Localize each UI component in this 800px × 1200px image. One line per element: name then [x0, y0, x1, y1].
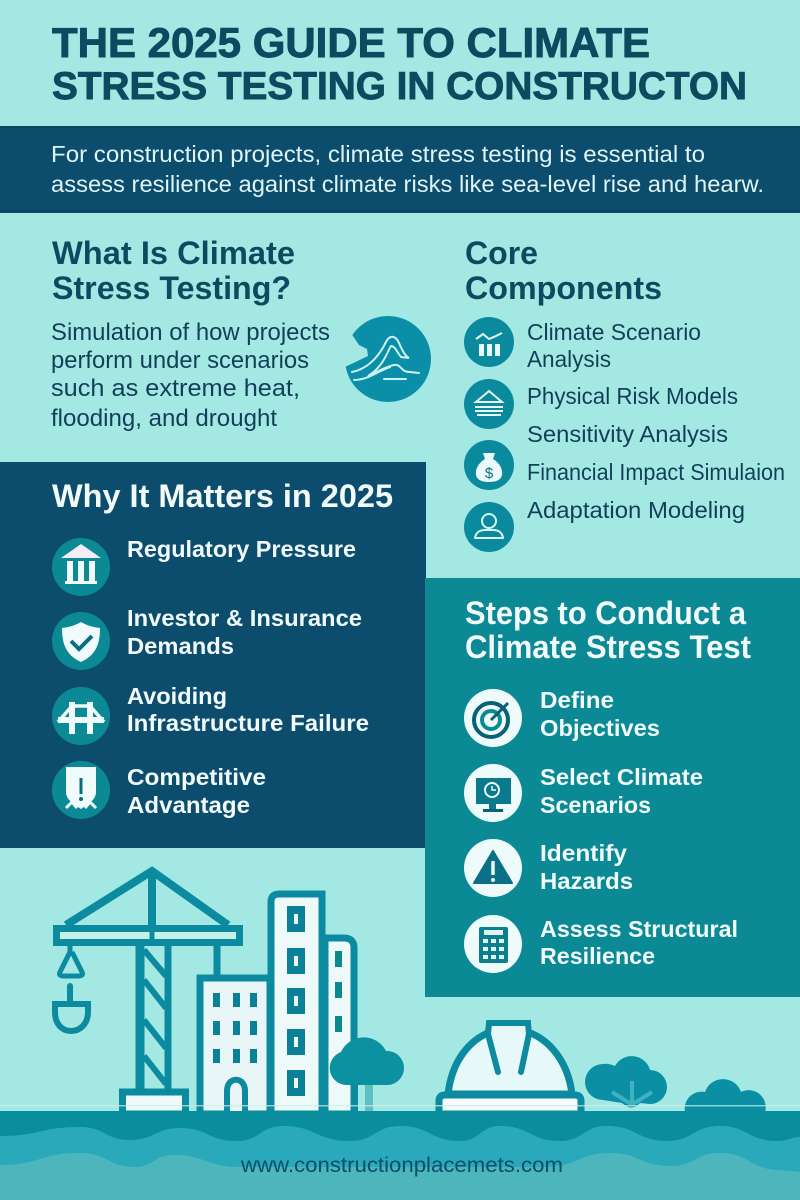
icon: calculator: [464, 915, 522, 973]
illustration: tree: [330, 1037, 404, 1114]
title: STRESS TESTING IN CONSTRUCTON: [52, 65, 747, 108]
text: assess structural resilience: Resilience: [540, 943, 655, 969]
text: competitive advantage: Advantage: [127, 792, 250, 818]
text: climate scenario analysis: Analysis: [527, 346, 611, 372]
text: define objectives: Objectives: [540, 715, 660, 741]
text block: definition: such as extreme heat,: [51, 375, 300, 402]
text block: definition: perform under scenarios: [51, 347, 309, 374]
heading: core components: [465, 235, 662, 306]
icon: target: [464, 689, 522, 747]
text: identify hazards: Hazards: [540, 868, 633, 894]
text: avoiding infrastructure failure: Infrastructure Failure: [127, 710, 369, 736]
icon: warning triangle: [464, 839, 522, 897]
icon: alert shield: [52, 761, 110, 819]
heading: what is climate stress testing: Stress Testing?: [52, 270, 291, 306]
heading: core components: Components: [465, 270, 662, 306]
panel: what is climate stress testing: [51, 235, 431, 432]
text: competitive advantage: Competitive: [127, 764, 266, 790]
text: investor and insurance demands: Demands: [127, 633, 234, 659]
text: identify hazards: [540, 840, 633, 894]
text block: definition: flooding, and drought: [51, 405, 277, 432]
illustration: cloud shrub: [585, 1056, 667, 1108]
panel: intro banner: [0, 126, 800, 213]
text: select climate scenarios: Select Climate: [540, 764, 703, 790]
illustration: hard hat: [439, 1023, 581, 1114]
icon: wave: [335, 316, 431, 402]
icon: bridge: [52, 687, 110, 745]
text: assess structural resilience: [540, 916, 738, 969]
text: investor and insurance demands: [127, 605, 362, 659]
text: sensitivity analysis: Sensitivity Analysis: [527, 421, 728, 447]
text: identify hazards: Identify: [540, 840, 627, 866]
panel: steps to conduct a climate stress test: [425, 578, 800, 997]
footer url: www.constructionplacemets.com: [240, 1154, 563, 1177]
heading: what is climate stress testing: [52, 235, 295, 306]
icon: institution: [52, 538, 110, 596]
icon: chart: [464, 317, 514, 367]
text: investor and insurance demands: Investor & Insurance: [127, 605, 362, 631]
icon: shield check: [52, 612, 110, 670]
illustration: crane: [55, 871, 240, 1114]
panel: why it matters: [0, 462, 426, 848]
title: [52, 19, 747, 108]
heading: why it matters: Why It Matters in 2025: [52, 478, 393, 514]
heading: what is climate stress testing: What Is Climate: [52, 235, 295, 271]
text: avoiding infrastructure failure: Avoiding: [127, 683, 227, 709]
heading: core components: Core: [465, 235, 538, 271]
text: financial impact simulaion: Financial Impact Simulaion: [527, 459, 785, 485]
text: climate scenario analysis: [527, 319, 701, 372]
panel: intro banner: For construction projects, climate stress testing is essential to: [51, 141, 705, 167]
building: right block: [325, 938, 354, 1114]
illustration: bush: [685, 1079, 766, 1112]
icon: money bag: $: [485, 465, 494, 482]
ground and waves: [0, 1105, 800, 1200]
icon: monitor: [464, 764, 522, 822]
text: avoiding infrastructure failure: [127, 683, 369, 736]
text: climate scenario analysis: Climate Scenario: [527, 319, 701, 345]
text: select climate scenarios: Scenarios: [540, 792, 651, 818]
text: regulatory pressure: Regulatory Pressure: [127, 536, 356, 562]
title: THE 2025 GUIDE TO CLIMATE: [52, 19, 650, 66]
text block: definition: Simulation of how projects: [51, 319, 330, 346]
text: select climate scenarios: [540, 764, 703, 818]
text block: definition: [51, 319, 330, 432]
panel: core components: [464, 235, 785, 552]
panel: intro banner: assess resilience against climate risks like sea-level rise and hearw.: [51, 171, 764, 197]
icon: money bag: [464, 440, 514, 490]
text: define objectives: [540, 687, 660, 741]
heading: steps: Steps to Conduct a: [465, 595, 746, 631]
text: competitive advantage: [127, 764, 266, 818]
text: physical risk models: Physical Risk Models: [527, 383, 738, 409]
icon: person: [464, 502, 514, 552]
building: low block: [200, 978, 270, 1114]
heading: steps: Climate Stress Test: [465, 629, 751, 665]
heading: steps: [465, 595, 751, 665]
text: adaptation modeling: Adaptation Modeling: [527, 497, 745, 523]
illustration: buildings: [200, 894, 354, 1114]
text: assess structural resilience: Assess Structural: [540, 916, 738, 942]
text: define objectives: Define: [540, 687, 614, 713]
building: tower: [271, 894, 322, 1114]
icon: layered roof: [464, 379, 514, 429]
